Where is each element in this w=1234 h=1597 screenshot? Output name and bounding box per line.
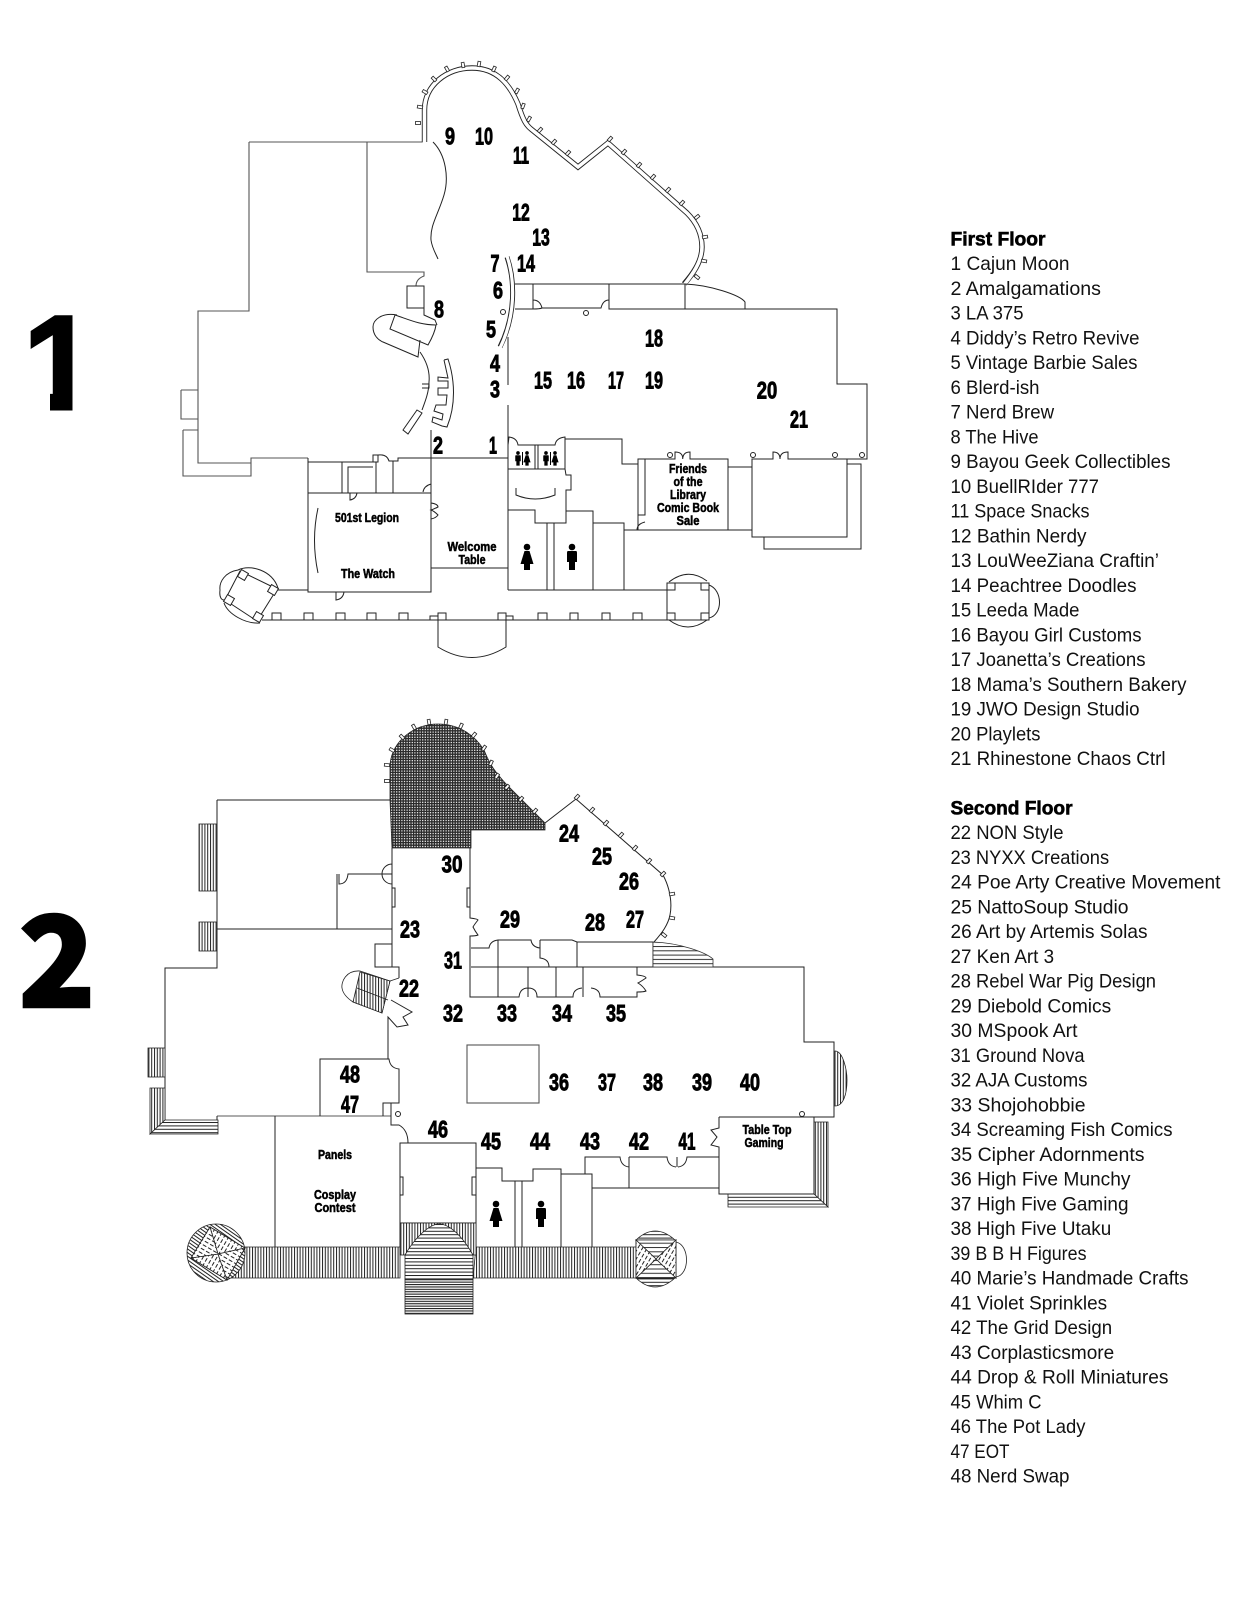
legend: first floor: 2 Amalgamations <box>950 278 1101 300</box>
booth numbers second floor: 26 <box>619 868 639 896</box>
west wavy wall <box>431 142 446 259</box>
booth numbers second floor: 36 <box>549 1070 569 1096</box>
booth numbers second floor: 48 <box>340 1062 360 1088</box>
legend: second floor: 28 Rebel War Pig Design <box>950 970 1156 992</box>
second floor plan <box>148 719 847 1314</box>
north east gallery wall <box>545 799 671 942</box>
booth numbers first floor: 7 <box>490 250 500 278</box>
closet box and stair <box>373 286 437 434</box>
legend: second floor: 33 Shojohobbie <box>950 1094 1086 1116</box>
first floor plan <box>181 61 867 657</box>
central display block <box>467 1045 539 1103</box>
room labels first floor: of the <box>674 475 703 489</box>
legend: first floor: 19 JWO Design Studio <box>950 698 1140 720</box>
south west hatched pavilion <box>187 1224 245 1282</box>
heading: first floor: First Floor <box>950 228 1046 250</box>
south west pavilion <box>220 568 278 623</box>
legend: first floor: 1 Cajun Moon <box>950 253 1070 275</box>
legend: first floor: 13 LouWeeZiana Craftin’ <box>950 550 1159 572</box>
legend: second floor: 45 Whim C <box>950 1391 1042 1413</box>
floor number 2: 2 <box>19 862 95 1044</box>
booth numbers first floor: 18 <box>645 326 663 352</box>
legend: second floor: 32 AJA Customs <box>950 1070 1088 1092</box>
icon: men's restroom <box>567 544 577 570</box>
hatched south colonnade <box>230 1223 636 1278</box>
booth numbers first floor: 8 <box>434 296 444 324</box>
east rounded balcony <box>835 1051 847 1106</box>
room labels first floor: The Watch <box>341 567 395 581</box>
pillar near panels <box>396 1112 400 1116</box>
booth numbers first floor: 14 <box>517 250 535 278</box>
gallery window ticks <box>384 719 538 814</box>
icon: women's restroom <box>520 544 534 570</box>
restroom block second floor <box>472 1143 561 1247</box>
booth numbers second floor: 29 <box>500 906 520 934</box>
legend: second floor: 34 Screaming Fish Comics <box>950 1119 1173 1141</box>
booth numbers second floor: 38 <box>643 1070 663 1096</box>
booth numbers second floor: 24 <box>559 820 579 848</box>
icon: women's restroom <box>490 1201 502 1227</box>
booth numbers first floor: 19 <box>645 368 663 394</box>
table top terrace hatch <box>728 1122 828 1207</box>
booth numbers second floor: 37 <box>598 1070 616 1096</box>
booth numbers first floor: 17 <box>608 368 624 394</box>
legend: second floor: 39 B B H Figures <box>950 1243 1087 1265</box>
legend: second floor: 24 Poe Arty Creative Movement <box>950 872 1221 894</box>
room labels first floor <box>335 462 719 581</box>
legend: second floor: 29 Diebold Comics <box>950 995 1111 1017</box>
west curve in 501st room <box>314 508 318 573</box>
north east window ticks <box>574 794 675 938</box>
north curved gallery wall <box>424 68 702 285</box>
booth numbers first floor: 21 <box>790 406 808 434</box>
room labels first floor: Comic Book <box>657 501 719 515</box>
hatched spiral stair <box>342 971 399 1013</box>
booth numbers second floor: 25 <box>592 844 612 870</box>
booth numbers first floor <box>433 124 808 460</box>
room labels first floor: Friends <box>669 462 707 476</box>
legend: first floor: 7 Nerd Brew <box>950 402 1055 424</box>
legend: first floor: 10 BuellRIder 777 <box>950 476 1099 498</box>
legend: second floor: 47 EOT <box>950 1441 1010 1463</box>
booth numbers second floor: 47 <box>341 1092 359 1118</box>
legend: second floor: 31 Ground Nova <box>950 1045 1085 1067</box>
legend: second floor: 36 High Five Munchy <box>950 1168 1131 1190</box>
icon: restroom pair A <box>515 451 531 466</box>
legend: second floor: 25 NattoSoup Studio <box>950 896 1129 918</box>
room labels first floor: Library <box>670 488 706 502</box>
table top gaming room <box>711 1117 814 1194</box>
legend: second floor: 27 Ken Art 3 <box>950 946 1054 968</box>
booth numbers second floor: 23 <box>400 916 420 944</box>
booth numbers first floor: 4 <box>490 350 500 378</box>
south east pavilion <box>667 574 720 627</box>
booth numbers second floor: 31 <box>444 948 462 974</box>
room labels first floor: Sale <box>676 514 700 528</box>
legend: second floor: 40 Marie’s Handmade Crafts <box>950 1268 1189 1290</box>
legend: first floor: 5 Vintage Barbie Sales <box>950 352 1138 374</box>
heading: second floor: Second Floor <box>950 797 1073 819</box>
room labels second floor <box>314 1123 792 1215</box>
south corridor rooms <box>561 1157 719 1247</box>
icon: restroom pair B <box>543 451 559 466</box>
booth numbers second floor: 45 <box>481 1128 501 1156</box>
booth numbers second floor: 34 <box>552 1000 572 1028</box>
legend: second floor: 44 Drop & Roll Miniatures <box>950 1366 1169 1388</box>
library pillar <box>668 452 672 458</box>
central corridor east wall <box>467 848 834 1117</box>
rooms 47 and 48 <box>320 1059 399 1116</box>
legend: second floor: 46 The Pot Lady <box>950 1416 1086 1438</box>
legend: second floor: 41 Violet Sprinkles <box>950 1292 1107 1314</box>
legend: first floor: 3 LA 375 <box>950 302 1024 324</box>
booth numbers second floor <box>340 820 760 1156</box>
front entrance <box>438 620 506 658</box>
restroom block <box>508 437 674 590</box>
gallery wall window ticks <box>415 61 708 280</box>
booth numbers second floor: 30 <box>442 852 462 878</box>
legend: first floor: 14 Peachtree Doodles <box>950 575 1137 597</box>
booth numbers first floor: 15 <box>534 368 552 394</box>
booth numbers second floor: 33 <box>497 1000 517 1028</box>
booth numbers first floor: 1 <box>489 432 497 460</box>
panels room walls <box>217 1116 476 1247</box>
room labels first floor: Table <box>458 553 486 567</box>
legend: second floor: 48 Nerd Swap <box>950 1466 1070 1488</box>
room labels second floor: Cosplay <box>314 1188 356 1202</box>
legend: first floor: 20 Playlets <box>950 723 1041 745</box>
room labels second floor: Gaming <box>744 1136 784 1150</box>
booth numbers second floor: 27 <box>626 906 644 934</box>
room labels second floor: Contest <box>314 1201 356 1215</box>
booth numbers first floor: 20 <box>757 378 777 404</box>
booth numbers second floor: 43 <box>580 1128 600 1156</box>
legend: first floor <box>950 228 1187 770</box>
booth numbers first floor: 3 <box>490 376 500 404</box>
legend: first floor: 9 Bayou Geek Collectibles <box>950 451 1171 473</box>
booth numbers second floor: 40 <box>740 1070 760 1096</box>
west window hatches <box>148 824 391 1134</box>
room labels first floor: Welcome <box>448 540 497 554</box>
booth numbers first floor: 6 <box>493 278 503 304</box>
booth numbers first floor: 10 <box>475 124 493 150</box>
booth numbers second floor: 44 <box>530 1128 550 1156</box>
icon: men's restroom <box>536 1201 546 1227</box>
legend: second floor: 23 NYXX Creations <box>950 847 1109 869</box>
room labels second floor: Panels <box>318 1148 352 1162</box>
legend: second floor: 26 Art by Artemis Solas <box>950 921 1148 943</box>
legend: first floor: 15 Leeda Made <box>950 600 1080 622</box>
curved central partition <box>500 256 513 348</box>
booth numbers first floor: 11 <box>513 142 529 170</box>
booth numbers first floor: 2 <box>433 432 443 460</box>
legend: second floor <box>950 797 1221 1488</box>
booth numbers second floor: 46 <box>428 1116 448 1144</box>
booth numbers first floor: 13 <box>532 224 550 252</box>
booth numbers second floor: 39 <box>692 1070 712 1096</box>
legend: first floor: 6 Blerd-ish <box>950 377 1040 399</box>
east wing pillars <box>750 452 864 458</box>
upper lobby wall and rooms <box>278 430 508 600</box>
east pillar <box>800 1112 804 1116</box>
legend: second floor: 38 High Five Utaku <box>950 1218 1111 1240</box>
legend: second floor: 35 Cipher Adornments <box>950 1144 1145 1166</box>
curved comb display <box>432 359 454 427</box>
legend: second floor: 43 Corplasticsmore <box>950 1342 1114 1364</box>
library sale room <box>637 452 752 530</box>
booth numbers first floor: 12 <box>512 200 530 226</box>
legend: first floor: 4 Diddy’s Retro Revive <box>950 327 1140 349</box>
legend: first floor: 12 Bathin Nerdy <box>950 525 1087 547</box>
booth numbers second floor: 41 <box>678 1128 696 1156</box>
legend: second floor: 37 High Five Gaming <box>950 1193 1128 1215</box>
booth numbers second floor: 32 <box>443 1000 463 1028</box>
legend: first floor: 8 The Hive <box>950 426 1038 448</box>
west wing outline <box>165 800 412 1120</box>
room labels second floor: Table Top <box>742 1123 792 1137</box>
booth numbers second floor: 28 <box>585 910 605 936</box>
booth numbers first floor: 5 <box>486 316 496 344</box>
booth numbers second floor: 22 <box>399 976 419 1002</box>
room labels first floor: 501st Legion <box>335 511 399 525</box>
legend: second floor: 22 NON Style <box>950 822 1064 844</box>
legend: first floor: 16 Bayou Girl Customs <box>950 624 1142 646</box>
hatched north east stair <box>653 942 713 967</box>
south colonnade <box>262 613 667 620</box>
east wing room <box>752 452 861 549</box>
south east hatched pavilion <box>636 1231 686 1287</box>
floor number 1: 1 <box>23 289 98 438</box>
central corridor wall <box>508 284 867 590</box>
legend: first floor: 17 Joanetta’s Creations <box>950 649 1146 671</box>
legend: first floor: 21 Rhinestone Chaos Ctrl <box>950 748 1166 770</box>
booth numbers second floor: 42 <box>629 1128 649 1156</box>
main entrance stairs <box>405 1224 473 1314</box>
booth numbers second floor: 35 <box>606 1000 626 1028</box>
booth numbers first floor: 9 <box>445 124 455 150</box>
legend: first floor: 11 Space Snacks <box>950 500 1090 522</box>
legend: second floor: 42 The Grid Design <box>950 1317 1112 1339</box>
west wing outline <box>181 142 424 476</box>
closed hatched gallery <box>390 724 545 848</box>
legend: first floor: 18 Mama’s Southern Bakery <box>950 674 1187 696</box>
hall pillar <box>584 310 588 316</box>
booth numbers first floor: 16 <box>567 368 585 394</box>
legend: second floor: 30 MSpook Art <box>950 1020 1078 1042</box>
